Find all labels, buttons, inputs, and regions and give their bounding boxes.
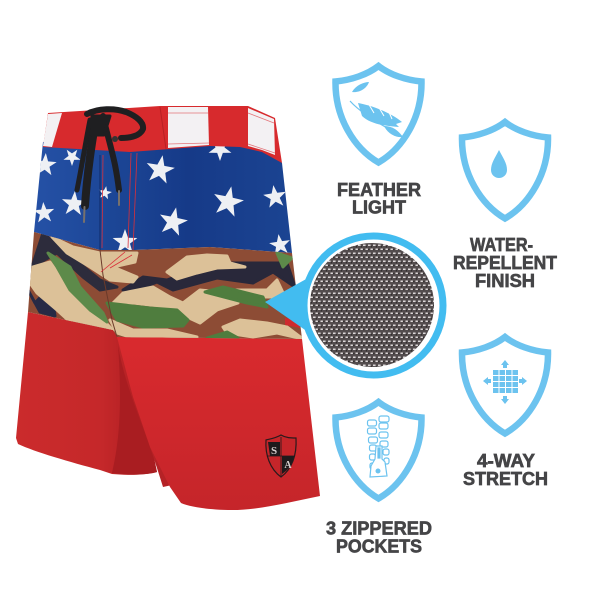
fabric zoom callout: [265, 236, 443, 375]
shield crest logo on leg: [266, 435, 296, 477]
icon: water drop: [491, 150, 507, 178]
label: WATER-: [470, 235, 533, 255]
feature: feather light: [335, 66, 422, 218]
shield icon: [462, 122, 548, 218]
feature: water-repellent finish: [453, 122, 557, 291]
fly stitching: [102, 153, 137, 250]
crest letters: S: [271, 445, 277, 457]
product photo: patriotic board shorts: [16, 106, 320, 510]
white stars: [33, 139, 292, 255]
icon: feathers: [350, 82, 403, 137]
green camo shapes: [48, 253, 107, 322]
flap hem: [150, 447, 172, 487]
feature: feather light: LIGHT: [352, 198, 406, 218]
feature: water-repellent finish: FINISH: [475, 271, 535, 291]
callout ring: [304, 236, 443, 375]
waistband with flag stripes: [43, 106, 282, 163]
side pocket zip: [285, 318, 300, 328]
shield crest logo on leg: A: [284, 460, 292, 471]
label: FEATHER: [337, 180, 421, 200]
feature: 3 zippered pockets: POCKETS: [336, 536, 422, 556]
shield icon: [335, 66, 422, 162]
label: 4-WAY: [477, 451, 535, 471]
fabric texture swatch: [310, 243, 434, 367]
blue star band: [33, 139, 292, 255]
feature: 4-way stretch: [462, 337, 548, 489]
feature: 4-way stretch: STRETCH: [463, 469, 548, 489]
fly seam: [100, 250, 117, 337]
shield icon: [335, 402, 422, 498]
tan camo shapes: [52, 237, 137, 282]
front leg red panel: [117, 337, 320, 510]
shield icon: [462, 337, 548, 434]
icon: zipper: [368, 416, 389, 477]
icon: stretch grid with arrows: [483, 360, 527, 404]
callout pointer: [265, 278, 308, 332]
back leg red panel: [16, 312, 157, 475]
label: 3 ZIPPERED: [326, 518, 432, 538]
feature: 3 zippered pockets: [326, 402, 432, 556]
dark camo shapes: [32, 233, 117, 290]
camouflage band: [28, 232, 302, 339]
feature: water-repellent finish: REPELLENT: [453, 253, 557, 273]
inner fold shadow: [112, 345, 157, 474]
black drawstring: [77, 109, 143, 222]
